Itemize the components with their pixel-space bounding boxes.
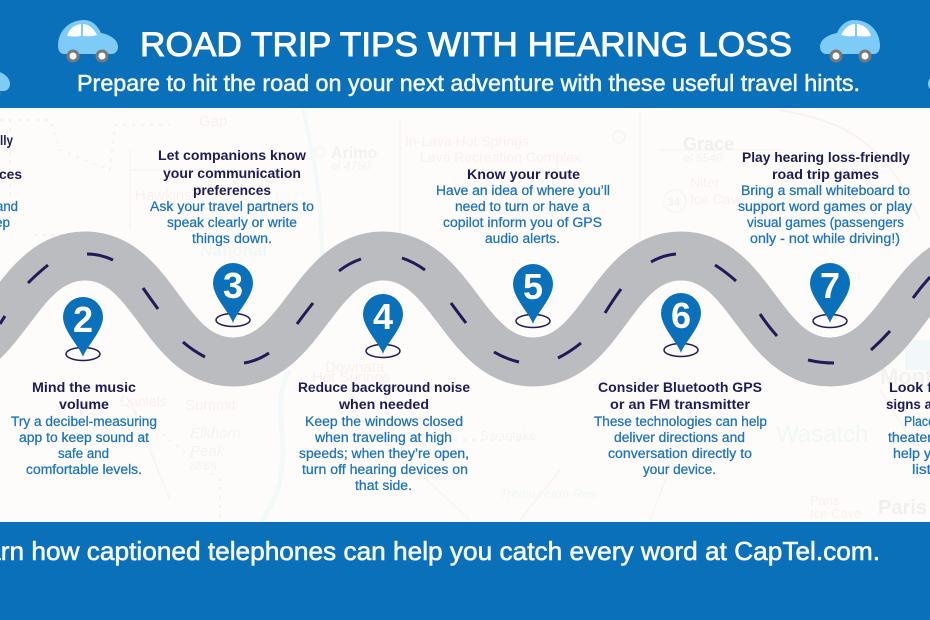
tip 4 text: turn off hearing devices on (302, 462, 468, 477)
tip 2 text (11, 380, 157, 477)
tip 5 text (436, 167, 610, 246)
background road map: Summit (185, 397, 237, 414)
tip 7 text: visual games (passengers (747, 215, 904, 230)
background road map: Paris (878, 497, 927, 519)
tip 5 (436, 167, 610, 328)
background road map: Niter (690, 174, 720, 190)
tip 6 text: your device. (643, 462, 716, 477)
pin 4 (363, 294, 403, 358)
background road map: Hot Springs (312, 369, 390, 386)
tip 6 text: deliver directions and (614, 430, 745, 445)
pin 7: 7 (820, 265, 840, 306)
pin 6 (661, 293, 701, 356)
tip 7 (738, 150, 912, 328)
tip 3 text: Ask your travel partners to (150, 199, 314, 214)
tip 4 text: Reduce background noise (298, 380, 470, 395)
tip 2 text: app to keep sound at (19, 430, 149, 445)
tip 5 text: Know your route (467, 167, 581, 182)
pin 4: 4 (373, 296, 393, 337)
tip 3 text: speak clearly or write (167, 215, 297, 230)
tip 7 text: only - not while driving!) (750, 231, 900, 246)
road (0, 254, 930, 363)
background road map (0, 108, 930, 522)
tip 2 text: volume (59, 397, 110, 412)
tip 7 text: Bring a small whiteboard to (741, 183, 910, 198)
tip 1 (cropped): lly (0, 133, 13, 148)
tip 7 text: support word games or play (738, 199, 912, 214)
background road map: ford (430, 464, 461, 484)
tip 3 text: things down. (192, 231, 272, 246)
pin 3 (213, 263, 253, 326)
tip 3 text: Let companions know (158, 148, 307, 163)
background road map: Treasureton Res (500, 486, 596, 501)
tip 4 text: speeds; when they’re open, (299, 446, 469, 461)
tip 4 text: Keep the windows closed (305, 414, 463, 429)
background road map: Downata (325, 359, 385, 376)
background road map: el 5540 (683, 151, 723, 165)
footer band (0, 522, 930, 620)
background road map: Hawkins (135, 187, 192, 204)
road centre dashes (0, 254, 930, 363)
pin 6: 6 (671, 295, 691, 336)
background road map: Paris (810, 493, 840, 508)
icon: car partial right edge (928, 57, 930, 98)
pin 2 (63, 297, 103, 360)
pin 5: 5 (523, 266, 543, 307)
subtitle: Prepare to hit the road on your next adventure with these useful travel hints. (77, 70, 860, 96)
tip 2 text: comfortable levels. (26, 462, 142, 477)
tip 4 text: when needed (338, 397, 429, 412)
tip 6 text (594, 380, 767, 477)
tip 7 text: road trip games (772, 167, 879, 182)
tip 6 (594, 293, 767, 477)
tip 4 text: when traveling at high (314, 430, 452, 445)
pin 2: 2 (73, 299, 93, 340)
tip 3 (150, 148, 314, 326)
tip 5 text: copilot inform you of GPS (443, 215, 602, 230)
tip 8 (cropped): list (912, 462, 930, 477)
tip 3 text: preferences (193, 183, 271, 198)
tip 8 (cropped): theater (888, 430, 930, 445)
background road map: 8868 (190, 459, 217, 473)
title: ROAD TRIP TIPS WITH HEARING LOSS (140, 26, 792, 64)
background road map: Ice Cave (810, 506, 861, 521)
tip 5 text: audio alerts. (485, 231, 560, 246)
background road map: Lava Recreation Complex (420, 149, 581, 165)
tip 8 (cropped): Look f (889, 380, 930, 395)
tip 5 text: Have an idea of where you’ll (436, 183, 610, 198)
background road map: Gap (199, 113, 227, 130)
tip 5 text: need to turn or have a (455, 199, 591, 214)
tip 1 (cropped) (0, 133, 22, 230)
tip 4 text: that side. (355, 478, 412, 493)
tip 7 text: Play hearing loss-friendly (742, 150, 910, 165)
background road map: Swanlake (480, 428, 536, 443)
tip 2 text: Try a decibel-measuring (11, 414, 157, 429)
background road map: 34 (667, 195, 681, 209)
tip 2 (11, 297, 157, 477)
tip 7 text (738, 150, 912, 246)
icon: car left (58, 20, 118, 61)
tip 8 (cropped) (886, 380, 930, 477)
pin 5 (513, 264, 553, 328)
background road map: Wasatch (776, 421, 868, 448)
background road map: Peak (190, 443, 226, 460)
background road map: el 4750 (331, 159, 371, 173)
icon: car partial left edge (0, 57, 10, 98)
tip 3 text: your communication (163, 166, 301, 181)
background road map: Ice Cave (690, 191, 745, 207)
tip 6 text: Consider Bluetooth GPS (598, 380, 762, 395)
background road map: Arimo (331, 145, 377, 162)
pin 7 (810, 263, 850, 328)
pin 3: 3 (223, 265, 243, 306)
tip 4 text (298, 380, 470, 493)
background road map: Elkhorn (190, 425, 241, 442)
tip 2 text: Mind the music (32, 380, 137, 395)
background road map: In-Lava Hot Springs (405, 133, 529, 149)
tip 3 text (150, 148, 314, 246)
tip 6 text: conversation directly to (608, 446, 752, 461)
icon: car right (820, 20, 880, 61)
header band (0, 0, 930, 108)
background road map: National (200, 241, 267, 260)
tip 2 text: safe and (58, 446, 109, 461)
tip 6 text: These technologies can help (594, 414, 767, 429)
background road map: Grace (683, 134, 734, 154)
tip 6 text: or an FM transmitter (610, 397, 751, 412)
tip 8 (cropped): help y (893, 446, 930, 461)
background road map: Daniels (120, 393, 167, 409)
tip 4 (298, 294, 470, 493)
